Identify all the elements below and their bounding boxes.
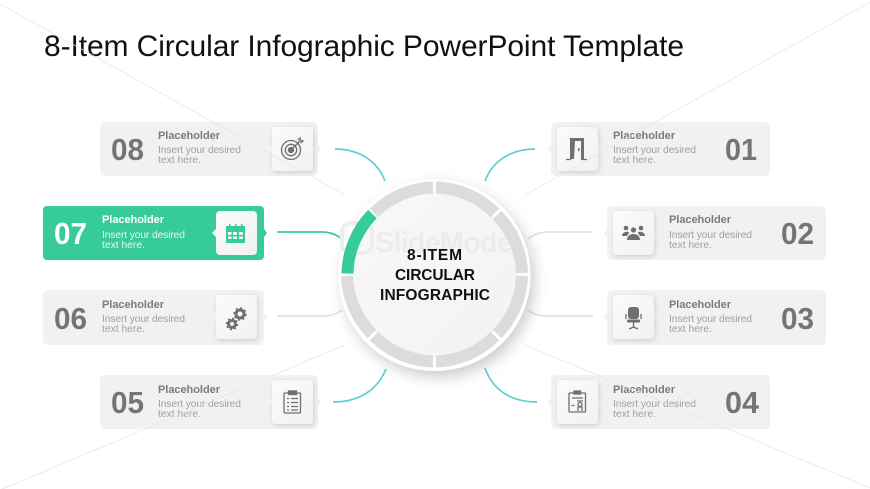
card 08 [100, 122, 321, 176]
ring segments [347, 188, 522, 362]
card 04: text here. [613, 409, 656, 420]
card 06: Placeholder [102, 299, 165, 311]
card 02: 02 [781, 216, 814, 251]
connector: 06 [277, 310, 342, 316]
card 04: Insert your desired [613, 399, 696, 410]
card 04 [548, 375, 770, 429]
card 07 (active) [43, 206, 267, 260]
card 06: text here. [102, 324, 145, 335]
card 06: 06 [54, 301, 87, 336]
card 08: text here. [158, 155, 201, 166]
card 01: text here. [613, 155, 656, 166]
connector: 03 [528, 310, 593, 316]
card 04: 04 [725, 385, 760, 420]
card 05: Placeholder [158, 384, 221, 396]
card 03: Insert your desired [669, 314, 752, 325]
card 02 [604, 206, 826, 260]
center label: INFOGRAPHIC [380, 287, 490, 304]
card 07 (active): Placeholder [102, 214, 165, 226]
title: 8-Item Circular Infographic PowerPoint Template [44, 30, 684, 63]
icon: gears [226, 308, 246, 330]
card 08: Placeholder [158, 130, 221, 142]
icon: door [566, 138, 587, 160]
connector: 04 [485, 368, 537, 402]
card 07 (active): text here. [102, 240, 145, 251]
card 07 (active): 07 [54, 216, 87, 251]
card 08: 08 [111, 132, 144, 167]
icon: target [282, 138, 303, 160]
card 05 [100, 375, 321, 429]
card 01 [548, 122, 770, 176]
card 02: Placeholder [669, 214, 732, 226]
watermark: .com [520, 244, 540, 254]
watermark: SlideModel [375, 227, 520, 259]
card 08: Insert your desired [158, 145, 241, 156]
card 03: text here. [669, 324, 712, 335]
card 06: Insert your desired [102, 314, 185, 325]
card 05: 05 [111, 385, 144, 420]
card 02: Insert your desired [669, 230, 752, 241]
card 04: Placeholder [613, 384, 676, 396]
connector: 05 [333, 369, 386, 402]
connector: 01 [485, 149, 535, 181]
card 05: Insert your desired [158, 399, 241, 410]
card 03: 03 [781, 301, 814, 336]
card 05: text here. [158, 409, 201, 420]
icon: calendar [226, 224, 245, 243]
icon: people [622, 226, 645, 240]
central circle [338, 179, 540, 371]
icon: certificate clipboard [569, 391, 586, 412]
card 01: 01 [725, 132, 757, 167]
icon: office chair [626, 307, 641, 329]
center label: 8-ITEM [407, 247, 462, 264]
card 01: Placeholder [613, 130, 676, 142]
connector: 02 [528, 232, 593, 239]
center label [380, 247, 490, 304]
connector: 07 [277, 232, 342, 239]
card 02: text here. [669, 240, 712, 251]
card 06 [43, 290, 267, 345]
card 03: Placeholder [669, 299, 732, 311]
icon: checklist clipboard [284, 391, 300, 413]
watermark [342, 223, 540, 259]
card 01: Insert your desired [613, 145, 696, 156]
center label: CIRCULAR [395, 267, 475, 284]
card 07 (active): Insert your desired [102, 230, 185, 241]
card 03 [604, 290, 826, 345]
active ring segment [348, 214, 372, 274]
connector: 08 [335, 149, 385, 181]
